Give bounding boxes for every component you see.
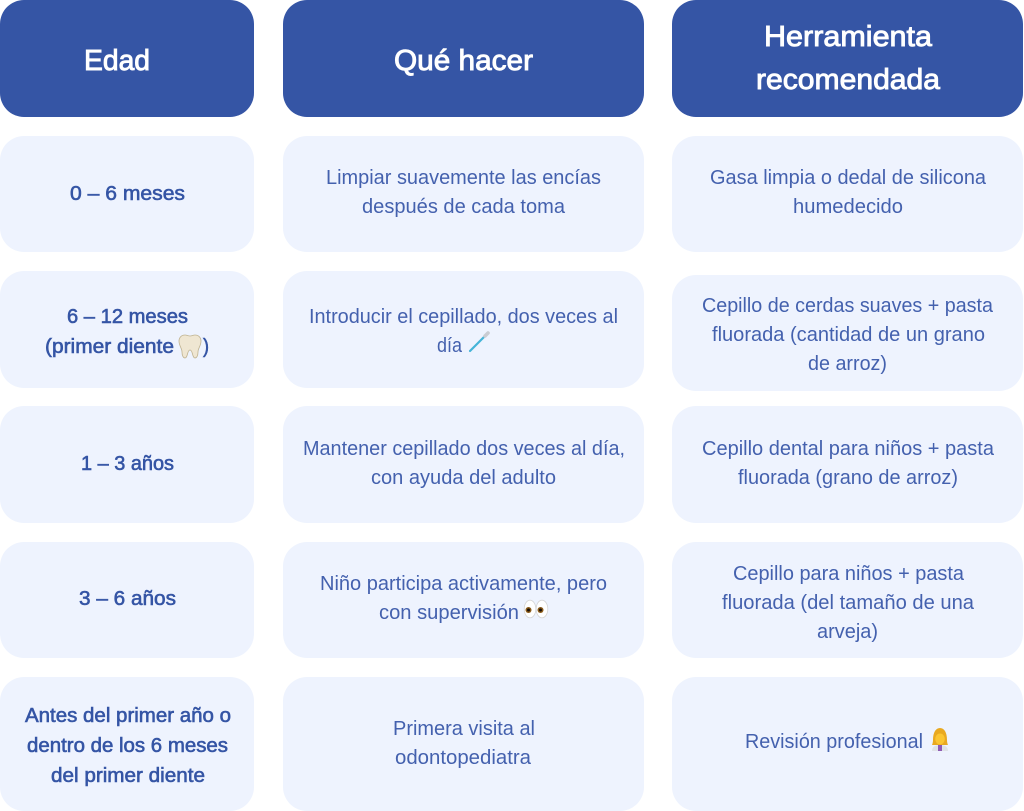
- cell: tool 3 to 6 years: fluorada (del tamaño de una: [722, 592, 975, 614]
- heading: Qué hacer: Qué hacer: [394, 45, 533, 77]
- cell: what to do 0 to 6 months: Limpiar suavemente las encías: [326, 167, 601, 189]
- cell: what to do 3 to 6 years: Niño participa activamente, pero: [320, 573, 607, 595]
- cell: what to do 6 to 12 months: día: [437, 335, 463, 357]
- icon: eyes: [524, 600, 548, 618]
- cell: age before first year: del primer diente: [51, 765, 205, 787]
- cell: tool professional review: [672, 677, 1023, 811]
- cell: tool 0 to 6 months: Gasa limpia o dedal de silicona: [710, 167, 987, 189]
- cell: age 1 to 3 years: [0, 406, 254, 523]
- cell: age 0 to 6 months: 0 – 6 meses: [70, 183, 185, 205]
- cell: what to do 6 to 12 months: Introducir el cepillado, dos veces al: [309, 306, 618, 328]
- cell: age 6 to 12 months: 6 – 12 meses: [67, 306, 188, 328]
- cell: what to do 1 to 3 years: Mantener cepillado dos veces al día,: [303, 438, 625, 460]
- cell: tool 1 to 3 years: Cepillo dental para niños + pasta: [702, 438, 995, 460]
- cell: tool 3 to 6 years: arveja): [817, 621, 878, 643]
- cell: tool 3 to 6 years: [672, 542, 1023, 658]
- cell: what to do 0 to 6 months: después de cada toma: [362, 196, 566, 218]
- icon: tooth: [179, 335, 201, 358]
- icon: toothbrush: [470, 333, 488, 351]
- cell: tool 0 to 6 months: [672, 136, 1023, 252]
- cell: tool 1 to 3 years: [672, 406, 1023, 523]
- cell: tool 3 to 6 years: Cepillo para niños + pasta: [733, 563, 965, 585]
- cell: what to do 1 to 3 years: [283, 406, 644, 523]
- cell: age 1 to 3 years: 1 – 3 años: [81, 453, 174, 475]
- cell: age 6 to 12 months: (primer diente: [45, 336, 174, 358]
- cell: tool 6 to 12 months: de arroz): [808, 353, 887, 375]
- heading: Edad: [0, 0, 254, 117]
- cell: age 3 to 6 years: [0, 542, 254, 658]
- cell: what to do first visit: odontopediatra: [395, 747, 532, 769]
- cell: what to do first visit: Primera visita al: [393, 718, 535, 740]
- cell: age 0 to 6 months: [0, 136, 254, 252]
- cell: tool professional review: Revisión profesional: [745, 731, 923, 753]
- cell: what to do first visit: [283, 677, 644, 811]
- cell: tool 1 to 3 years: fluorada (grano de arroz): [738, 467, 958, 489]
- icon: woman health worker: [932, 728, 948, 751]
- heading: Herramienta recomendada: recomendada: [756, 64, 941, 96]
- cell: age before first year: [0, 677, 254, 811]
- cell: age 6 to 12 months: ): [203, 336, 209, 358]
- heading: Edad: Edad: [84, 45, 150, 77]
- cell: age 3 to 6 years: 3 – 6 años: [79, 588, 176, 610]
- cell: what to do 0 to 6 months: [283, 136, 644, 252]
- cell: tool 6 to 12 months: Cepillo de cerdas suaves + pasta: [702, 295, 994, 317]
- cell: tool 0 to 6 months: humedecido: [793, 196, 903, 218]
- cell: what to do 3 to 6 years: [283, 542, 644, 658]
- heading: Herramienta recomendada: Herramienta: [764, 21, 933, 53]
- cell: what to do 3 to 6 years: con supervisión: [379, 602, 519, 624]
- cell: what to do 1 to 3 years: con ayuda del adulto: [371, 467, 556, 489]
- cell: age before first year: dentro de los 6 meses: [27, 735, 228, 757]
- cell: age 6 to 12 months: [0, 271, 254, 388]
- cell: age before first year: Antes del primer año o: [25, 705, 231, 727]
- heading: Qué hacer: [283, 0, 644, 117]
- cell: tool 6 to 12 months: [672, 275, 1023, 391]
- cell: tool 6 to 12 months: fluorada (cantidad de un grano: [712, 324, 985, 346]
- cell: what to do 6 to 12 months: [283, 271, 644, 388]
- heading: Herramienta recomendada: [672, 0, 1023, 117]
